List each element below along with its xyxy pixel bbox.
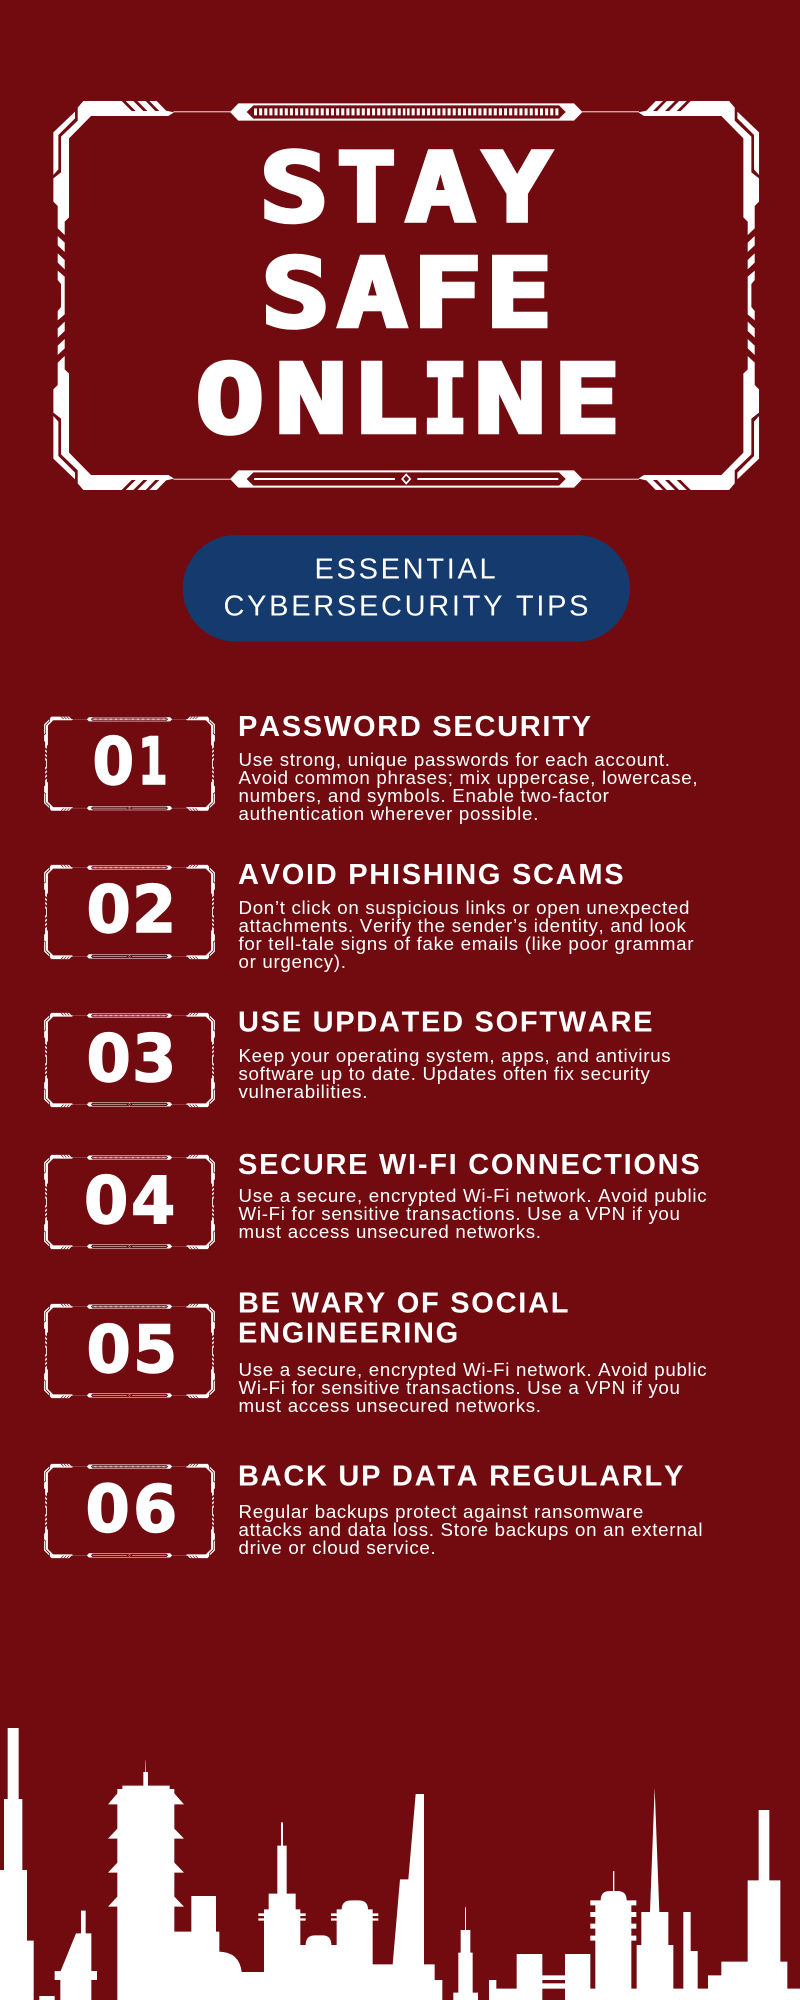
title: A	[338, 238, 407, 348]
title: O	[196, 344, 264, 454]
body 2: Don’t click on suspicious links or open unexpected	[238, 897, 690, 918]
body 1: numbers, and symbols. Enable two-factor	[238, 785, 610, 806]
title: I	[422, 346, 468, 455]
tip 1: password security	[44, 711, 698, 824]
title	[196, 132, 620, 455]
body 4: Wi-Fi for sensitive transactions. Use a VPN if you	[238, 1203, 681, 1224]
body 6: Regular backups protect against ransomware	[238, 1501, 644, 1522]
body 2: or urgency).	[238, 951, 347, 972]
title: S	[261, 238, 330, 348]
tip 5: social engineering	[44, 1288, 707, 1416]
number frame 3	[44, 1013, 215, 1107]
body 5: Wi-Fi for sensitive transactions. Use a VPN if you	[238, 1377, 681, 1398]
tip 6: backups	[44, 1461, 703, 1558]
number 02: 02	[86, 872, 176, 948]
number 01	[92, 724, 168, 800]
heading 1: PASSWORD SECURITY	[238, 711, 593, 743]
body 3: Keep your operating system, apps, and antivirus	[238, 1045, 671, 1066]
number 01: 1	[138, 724, 168, 799]
skyline	[0, 1728, 800, 2000]
body 4: must access unsecured networks.	[238, 1221, 542, 1242]
body 6: attacks and data loss. Store backups on an external	[238, 1519, 703, 1540]
body 1: authentication wherever possible.	[238, 803, 539, 824]
title: N	[275, 345, 347, 455]
title: E	[486, 239, 552, 349]
number frame 2	[44, 865, 215, 959]
body 6: drive or cloud service.	[238, 1537, 436, 1558]
title: Y	[484, 134, 551, 243]
heading 2: AVOID PHISHING SCAMS	[238, 859, 625, 891]
title: L	[352, 345, 418, 455]
body 1: Avoid common phrases; mix uppercase, lowercase,	[238, 767, 698, 788]
heading 5: ENGINEERING	[238, 1318, 460, 1350]
number 06: 06	[86, 1472, 177, 1548]
number frame 4	[44, 1155, 215, 1249]
heading 6: BACK UP DATA REGULARLY	[238, 1461, 685, 1493]
body 4: Use a secure, encrypted Wi-Fi network. Avoid public	[238, 1185, 707, 1206]
number 05: 05	[86, 1312, 177, 1388]
tip 4: wi-fi	[44, 1149, 707, 1249]
title: S	[260, 132, 329, 243]
title frame	[53, 101, 759, 490]
tip 3: updated software	[44, 1007, 671, 1107]
number 03: 03	[86, 1021, 176, 1097]
number frame 1	[44, 717, 215, 811]
heading 4: SECURE WI-FI CONNECTIONS	[238, 1149, 701, 1181]
body 5: Use a secure, encrypted Wi-Fi network. Avoid public	[238, 1359, 707, 1380]
tip 2: phishing	[44, 859, 694, 972]
body 3: vulnerabilities.	[238, 1081, 368, 1102]
body 2: attachments. Verify the sender’s identity, and look	[238, 915, 687, 936]
title: A	[406, 132, 475, 243]
heading 3: USE UPDATED SOFTWARE	[238, 1007, 654, 1039]
number 01: 0	[92, 724, 134, 800]
subtitle pill	[183, 535, 630, 642]
subtitle pill: CYBERSECURITY TIPS	[224, 590, 591, 622]
subtitle pill: ESSENTIAL	[314, 554, 498, 586]
title: N	[474, 345, 546, 455]
number frame 6	[44, 1464, 215, 1558]
heading 5: BE WARY OF SOCIAL	[238, 1288, 570, 1320]
number frame 5	[44, 1304, 215, 1398]
number 04: 04	[84, 1163, 175, 1239]
body 3: software up to date. Updates often fix security	[238, 1063, 651, 1084]
body 1: Use strong, unique passwords for each account.	[238, 749, 671, 770]
title: F	[412, 238, 482, 348]
body 5: must access unsecured networks.	[238, 1395, 542, 1416]
body 2: for tell-tale signs of fake emails (like poor grammar	[238, 933, 694, 954]
title: E	[554, 345, 620, 455]
title: T	[337, 132, 396, 243]
